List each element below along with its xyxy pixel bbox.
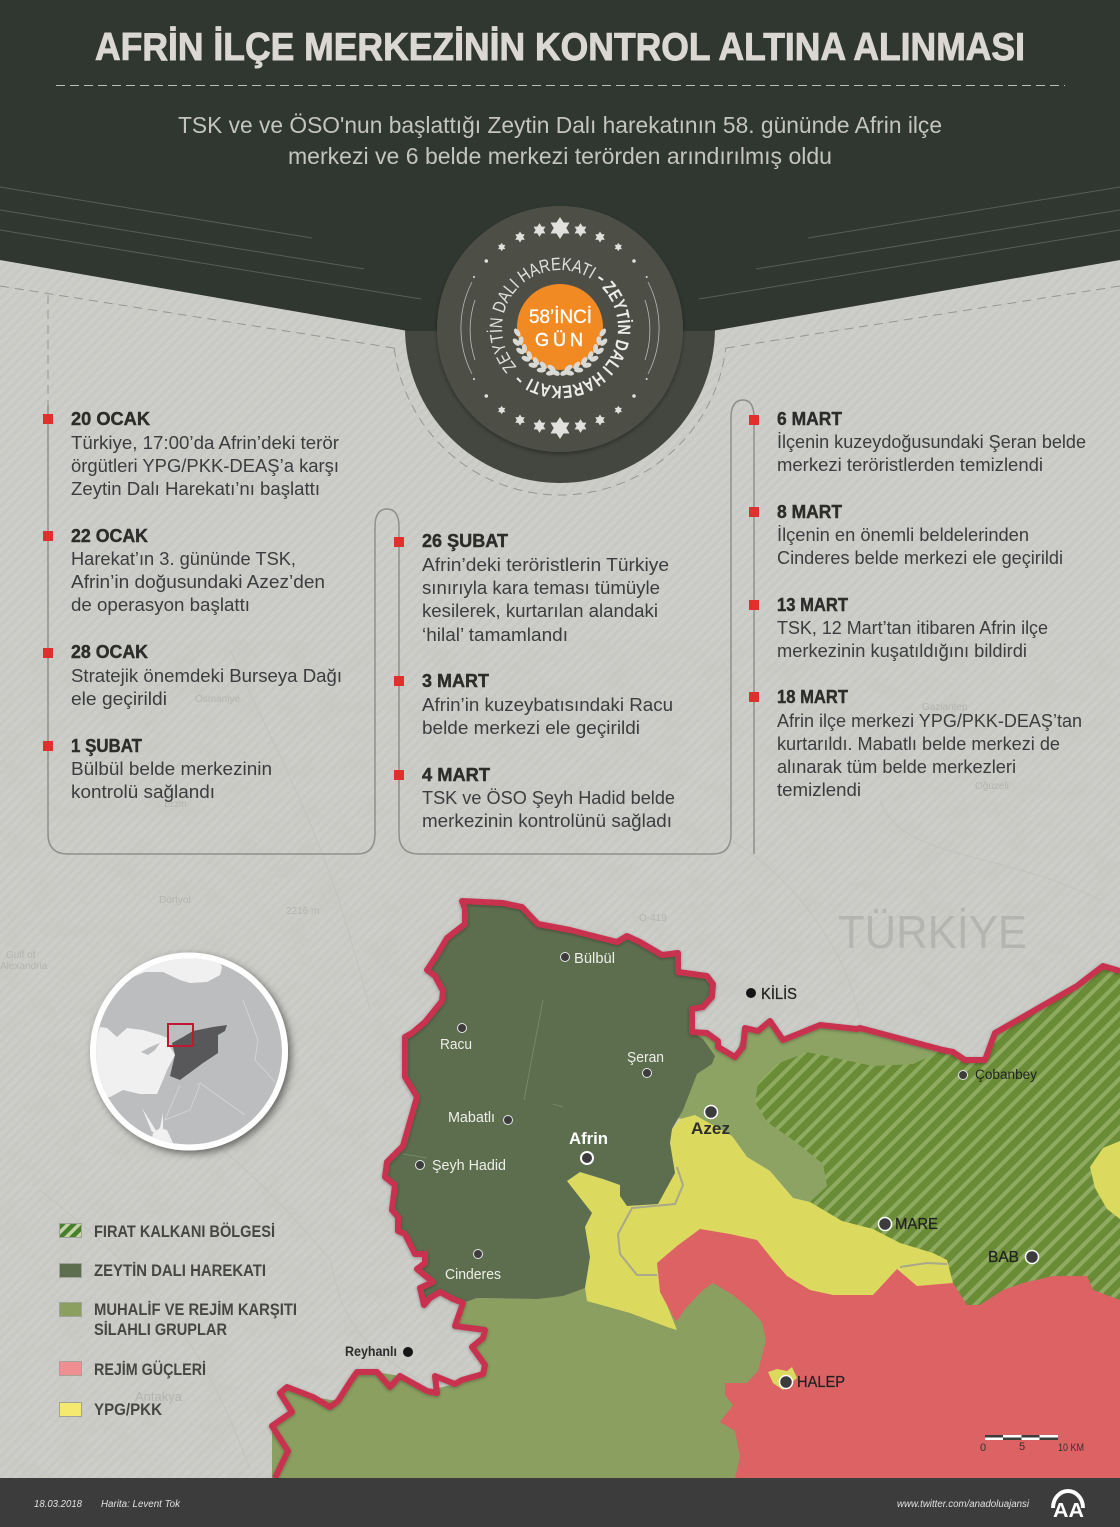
entry: 28 Ocak: Stratejik önemdeki Burseya Dağı	[71, 666, 342, 686]
entry: 6 Mart	[749, 409, 1086, 475]
entry: 20 Ocak: örgütleri YPG/PKK-DEAŞ’a karşı	[71, 456, 339, 476]
header band	[0, 0, 1120, 331]
entry: 26 Şubat: Afrin’deki teröristlerin Türkiye	[422, 555, 669, 575]
place: Şeran: Şeran	[627, 1050, 664, 1066]
entry: 8 Mart	[749, 502, 1063, 568]
entry: 22 Ocak: de operasyon başlattı	[71, 595, 250, 615]
entry: 18 Mart	[749, 687, 1082, 800]
entry: 18 Mart: alınarak tüm belde merkezleri	[777, 757, 1016, 777]
legend item: Fırat Kalkanı: FIRAT KALKANI BÖLGESİ	[94, 1222, 275, 1241]
entry: 26 Şubat: sınırıyla kara teması tümüyle	[422, 578, 660, 598]
place: Şeyh Hadid: Şeyh Hadid	[432, 1158, 506, 1174]
day number: 58’İNCİ	[529, 307, 592, 328]
footer	[0, 1478, 1120, 1527]
entry: 13 Mart: merkezinin kuşatıldığını bildirdi	[777, 641, 1027, 661]
entry: 22 Ocak	[43, 526, 325, 615]
map background: Gaziantep	[922, 702, 968, 713]
entry: 3 Mart	[394, 671, 673, 738]
entry: 26 Şubat: kesilerek, kurtarılan alandaki	[422, 601, 658, 621]
map background: Antakya	[135, 1389, 183, 1404]
footer: Harita: Levent Tok	[101, 1499, 181, 1510]
place: Çobanbey: Çobanbey	[975, 1067, 1037, 1082]
map background: Erzin	[164, 799, 187, 810]
circular text: ZEYTİN DALI HAREKATI	[526, 280, 634, 398]
legend item: Zeytin Dalı: ZEYTİN DALI HAREKATI	[94, 1262, 266, 1280]
legend item: Rejim	[60, 1360, 206, 1379]
place: Bab	[988, 1249, 1038, 1266]
timeline connector line	[48, 400, 754, 854]
badge: 58 inci gün	[436, 206, 684, 455]
entry: 8 Mart: 8 MART	[777, 502, 842, 522]
region: Fırat Kalkanı hatch	[755, 966, 1120, 1310]
entry: 1 Şubat: Bülbül belde merkezinin	[71, 759, 272, 779]
place: Şeran	[627, 1050, 664, 1078]
footer: www.twitter.com/anadoluajansi	[897, 1499, 1030, 1510]
entry: 1 Şubat: kontrolü sağlandı	[71, 782, 215, 802]
entry: 4 Mart	[394, 765, 675, 831]
entry: 22 Ocak: 22 OCAK	[71, 526, 148, 546]
entry: 13 Mart: TSK, 12 Mart’tan itibaren Afrin ilçe	[777, 618, 1048, 638]
place: Kilis	[746, 985, 797, 1003]
scale bar: 0	[980, 1442, 986, 1454]
title: AFRİN İLÇE MERKEZİNİN KONTROL ALTINA ALINMASI	[95, 26, 1025, 69]
region: armed opposition Azez	[675, 1021, 943, 1210]
region: YPG/PKK	[567, 1115, 953, 1330]
timeline column 1	[43, 409, 342, 802]
entry: 26 Şubat	[394, 531, 669, 645]
place: Racu: Racu	[440, 1037, 472, 1053]
place: Halep: HALEP	[797, 1374, 845, 1391]
legend item: YPG	[60, 1401, 162, 1419]
circular text: ZEYTİN DALI HAREKATI	[486, 258, 596, 374]
entry: 6 Mart: merkezi teröristlerden temizlendi	[777, 455, 1043, 475]
region: YPG/PKK east	[1090, 1141, 1120, 1219]
title divider	[56, 84, 1065, 86]
header rays	[0, 187, 1120, 299]
map background: 2216 m	[286, 906, 319, 917]
entry: 8 Mart: Cinderes belde merkezi ele geçirildi	[777, 548, 1063, 568]
day word: GÜN	[535, 330, 583, 350]
place: Reyhanlı: Reyhanlı	[345, 1344, 397, 1359]
place: Azez: Azez	[691, 1119, 730, 1138]
side arcs	[461, 282, 659, 374]
scale bar: 10 KM	[1058, 1442, 1084, 1454]
entry: 4 Mart: 4 MART	[422, 765, 490, 785]
circular text	[486, 258, 634, 398]
entry: 20 Ocak: 20 OCAK	[71, 409, 150, 429]
entry: 3 Mart: Afrin’in kuzeybatısındaki Racu	[422, 695, 673, 715]
map background: Osmaniye	[195, 694, 240, 705]
entry: 13 Mart	[749, 595, 1048, 661]
entry: 28 Ocak: ele geçirildi	[71, 689, 167, 709]
footer: 18.03.2018	[34, 1499, 82, 1510]
place: Kilis: KİLİS	[761, 985, 797, 1003]
orange disc	[517, 284, 603, 370]
legend item: Muhalif	[60, 1301, 297, 1339]
entry: 26 Şubat: 26 ŞUBAT	[422, 531, 508, 551]
icon: AA logo	[1053, 1491, 1084, 1522]
dashed guide lines	[0, 286, 1120, 495]
place: Afrin: Afrin	[569, 1129, 608, 1148]
entry: 18 Mart: temizlendi	[777, 780, 861, 800]
entry: 1 Şubat	[43, 736, 272, 802]
stars ring	[473, 217, 648, 439]
entry: 8 Mart: İlçenin en önemli beldelerinden	[777, 525, 1029, 545]
entry: 18 Mart: Afrin ilçe merkezi YPG/PKK-DEAŞ’tan	[777, 711, 1082, 731]
legend item: Muhalif: SİLAHLI GRUPLAR	[94, 1321, 227, 1339]
map background: Alexandria	[0, 961, 48, 972]
place: Mabatlı: Mabatlı	[448, 1110, 495, 1126]
region: regime forces	[657, 1229, 1120, 1478]
Türkiye label: TÜRKİYE	[838, 906, 1027, 958]
entry: 6 Mart: 6 MART	[777, 409, 842, 429]
region: armed opposition west	[272, 1283, 766, 1478]
faint river lines inside Afrin	[403, 1000, 563, 1158]
entry: 3 Mart: 3 MART	[422, 671, 489, 691]
map background: Oğuzeli	[975, 781, 1009, 792]
place: Mare: MARE	[895, 1216, 938, 1233]
map of Afrin and northern Syria	[272, 901, 1120, 1478]
entry: 28 Ocak	[43, 642, 342, 709]
subtitle: merkezi ve 6 belde merkezi terörden arındırılmış oldu	[288, 143, 832, 169]
entry: 26 Şubat: ‘hilal’ tamamlandı	[422, 625, 568, 645]
map labels and city markers	[345, 951, 1038, 1391]
place: Afrin	[569, 1129, 608, 1164]
legend	[60, 1222, 297, 1419]
entry: 20 Ocak: Türkiye, 17:00’da Afrin’deki terör	[71, 433, 339, 453]
entry: 1 Şubat: 1 ŞUBAT	[71, 736, 142, 756]
laurel wreath	[511, 327, 609, 377]
entry: 20 Ocak	[43, 409, 339, 499]
map background: Gulf of	[6, 950, 36, 961]
place: Cinderes	[445, 1250, 501, 1283]
place: Bab: BAB	[988, 1249, 1019, 1266]
legend item: Muhalif: MUHALİF VE REJİM KARŞITI	[94, 1301, 297, 1319]
entry: 18 Mart: 18 MART	[777, 687, 848, 707]
entry: 22 Ocak: Harekat’ın 3. gününde TSK,	[71, 549, 296, 569]
place: Bülbül: Bülbül	[574, 951, 615, 967]
map background: O-419	[639, 913, 667, 924]
region: Zeytin Dalı Harekatı	[385, 901, 715, 1305]
entry: 22 Ocak: Afrin’in doğusundaki Azez’den	[71, 572, 325, 592]
entry: 3 Mart: belde merkezi ele geçirildi	[422, 718, 640, 738]
locator globe	[80, 950, 288, 1150]
entry: 13 Mart: 13 MART	[777, 595, 848, 615]
legend item: YPG: YPG/PKK	[94, 1401, 162, 1419]
subtitle: TSK ve ve ÖSO'nun başlattığı Zeytin Dalı harekatının 58. gününde Afrin ilçe	[178, 112, 942, 138]
subtitle	[178, 112, 942, 169]
place: Azez	[691, 1106, 730, 1138]
place: Racu	[440, 1024, 472, 1053]
roads on yellow	[618, 1167, 947, 1275]
scale bar: 5	[1019, 1441, 1025, 1453]
legend item: Rejim: REJİM GÜÇLERİ	[94, 1360, 206, 1379]
entry: 6 Mart: İlçenin kuzeydoğusundaki Şeran belde	[777, 432, 1086, 452]
entry: 20 Ocak: Zeytin Dalı Harekatı’nı başlattı	[71, 479, 320, 499]
timeline column 2	[394, 531, 675, 831]
timeline column 3	[749, 409, 1086, 800]
entry: 28 Ocak: 28 OCAK	[71, 642, 148, 662]
outer badge circle	[405, 173, 715, 483]
region: YPG/PKK Halep	[768, 1367, 797, 1390]
place: Cinderes: Cinderes	[445, 1267, 501, 1283]
border line	[272, 901, 1120, 1478]
entry: 18 Mart: kurtarıldı. Mabatlı belde merkezi de	[777, 734, 1060, 754]
scale bar	[980, 1435, 1084, 1454]
icon: AA logo: AA	[1053, 1500, 1084, 1522]
entry: 4 Mart: merkezinin kontrolünü sağladı	[422, 811, 672, 831]
entry: 4 Mart: TSK ve ÖSO Şeyh Hadid belde	[422, 788, 675, 808]
map background: Dörtyol	[159, 895, 191, 906]
